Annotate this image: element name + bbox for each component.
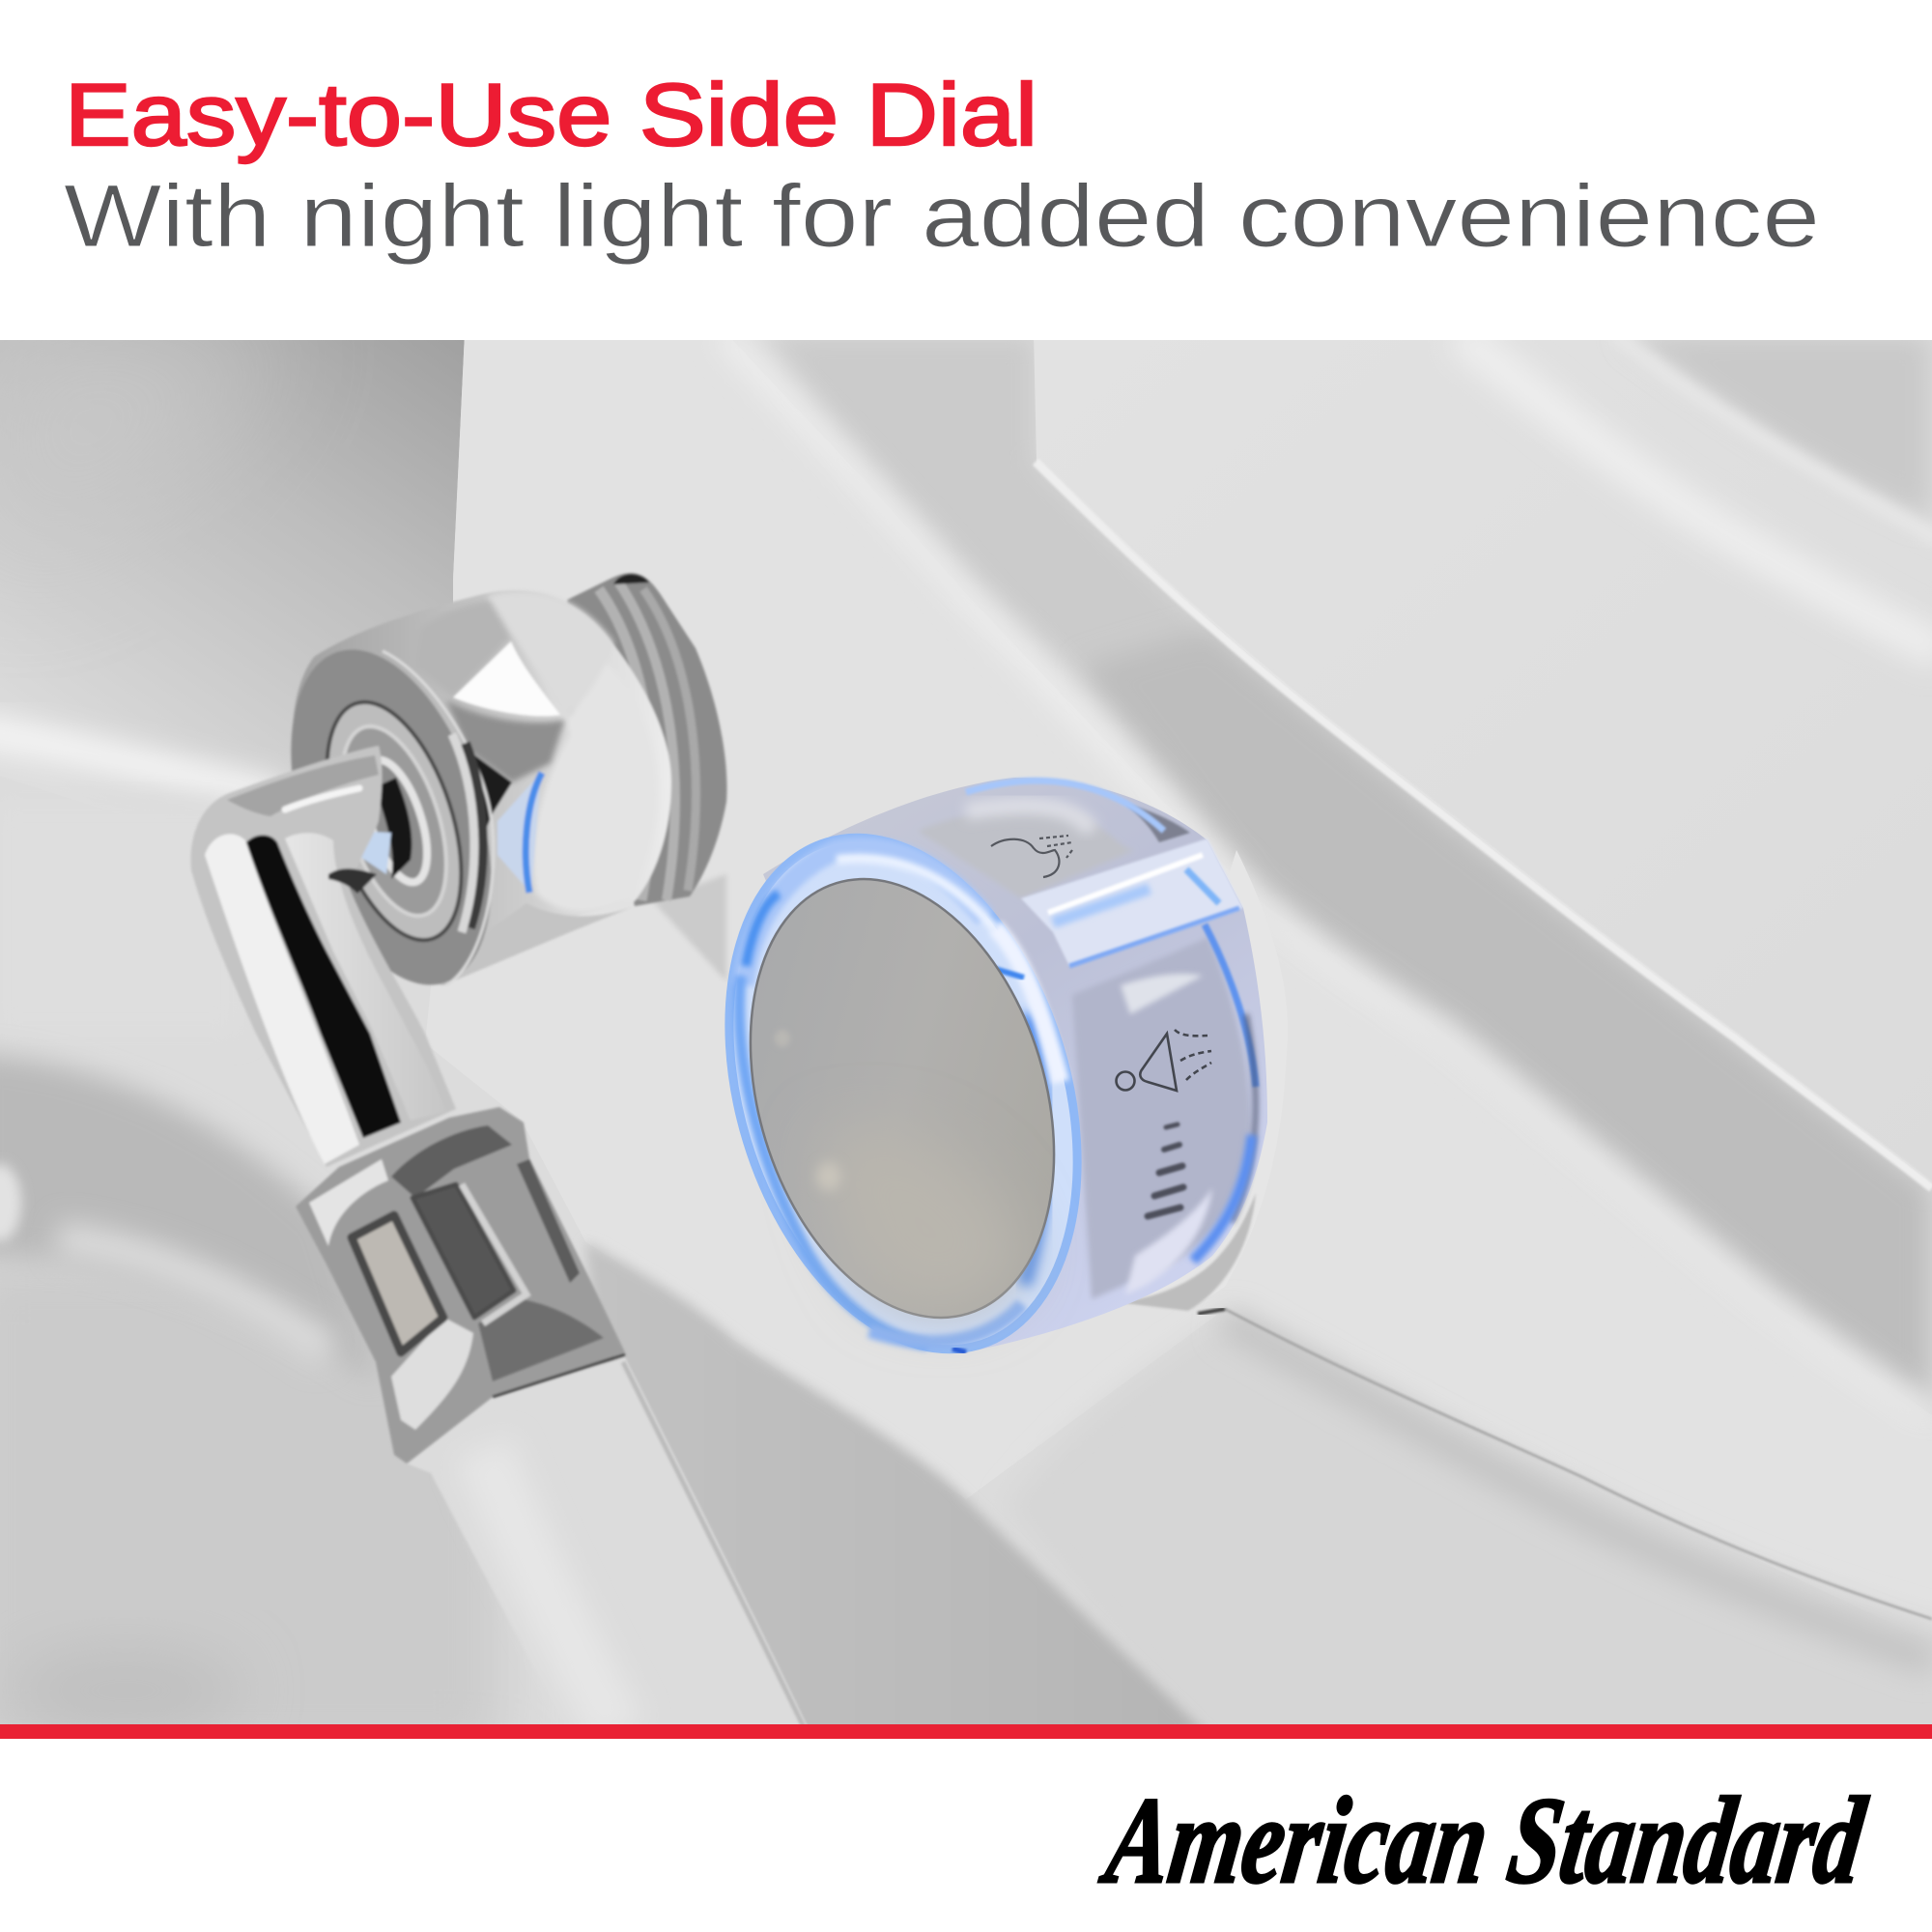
- translucent dial body: [763, 778, 1267, 1352]
- lid reflections: [1459, 333, 1932, 652]
- barrel highlight bulge: [533, 692, 593, 910]
- subtitle: With night light for added convenience: [64, 167, 1820, 266]
- white facet: [453, 641, 560, 716]
- diagonal highlight: [724, 333, 1932, 1415]
- arm right highlight: [285, 833, 446, 1121]
- collar highlights: [309, 1159, 388, 1246]
- top label band: [918, 808, 1135, 898]
- wedge right of hose: [585, 1241, 1222, 1748]
- arm black reflection: [246, 835, 401, 1138]
- flange ring: [253, 624, 529, 1010]
- arm left highlight: [205, 834, 359, 1164]
- side dial: [670, 778, 1288, 1393]
- top facet: [446, 601, 512, 692]
- photo background surfaces: [0, 333, 1932, 1768]
- dark reflection: [466, 749, 512, 840]
- red divider bar: [0, 1724, 1932, 1739]
- left window: [352, 1215, 443, 1352]
- glowing dial rim: [670, 794, 1136, 1393]
- dark top edge: [1125, 804, 1190, 842]
- lower label band: [1072, 937, 1251, 1299]
- right window: [517, 1159, 580, 1283]
- threaded collar: [567, 573, 727, 906]
- heading area: [0, 0, 1932, 340]
- shadow under threads: [653, 874, 726, 981]
- rim glow strokes: [739, 848, 1061, 1352]
- product photo: bidet side dial and hose fitting: [0, 333, 1932, 1768]
- barrel body: [293, 590, 671, 985]
- title: Easy-to-Use Side Dial: [65, 67, 1037, 164]
- bowl shadow: [0, 1053, 377, 1381]
- shaded facet: [446, 700, 565, 782]
- tank body: [453, 340, 465, 579]
- icon: pressure level bars: [1148, 1124, 1183, 1216]
- lower shadow band: [1082, 628, 1932, 1415]
- hose: [407, 1357, 813, 1739]
- hose crimp collar: [296, 1107, 625, 1463]
- dial mounting base: [1111, 850, 1288, 1311]
- lid: [1034, 333, 1932, 1182]
- left gradient wall: [0, 340, 464, 773]
- icon: massage wand: [991, 836, 1072, 877]
- icon: spray wash: [1117, 1030, 1211, 1091]
- lower barrel: [443, 903, 635, 985]
- elbow arm: [190, 746, 456, 1167]
- silver dial face: [699, 841, 1105, 1355]
- upper shadow band: [779, 340, 1198, 677]
- arm top highlight: [227, 755, 379, 816]
- chrome barrel fitting: [190, 573, 727, 1167]
- lower left base: [0, 1256, 502, 1758]
- middle window: [412, 1184, 514, 1318]
- seat body lower edge and seam: [1919, 1629, 1931, 1638]
- clear tab: [1021, 838, 1243, 966]
